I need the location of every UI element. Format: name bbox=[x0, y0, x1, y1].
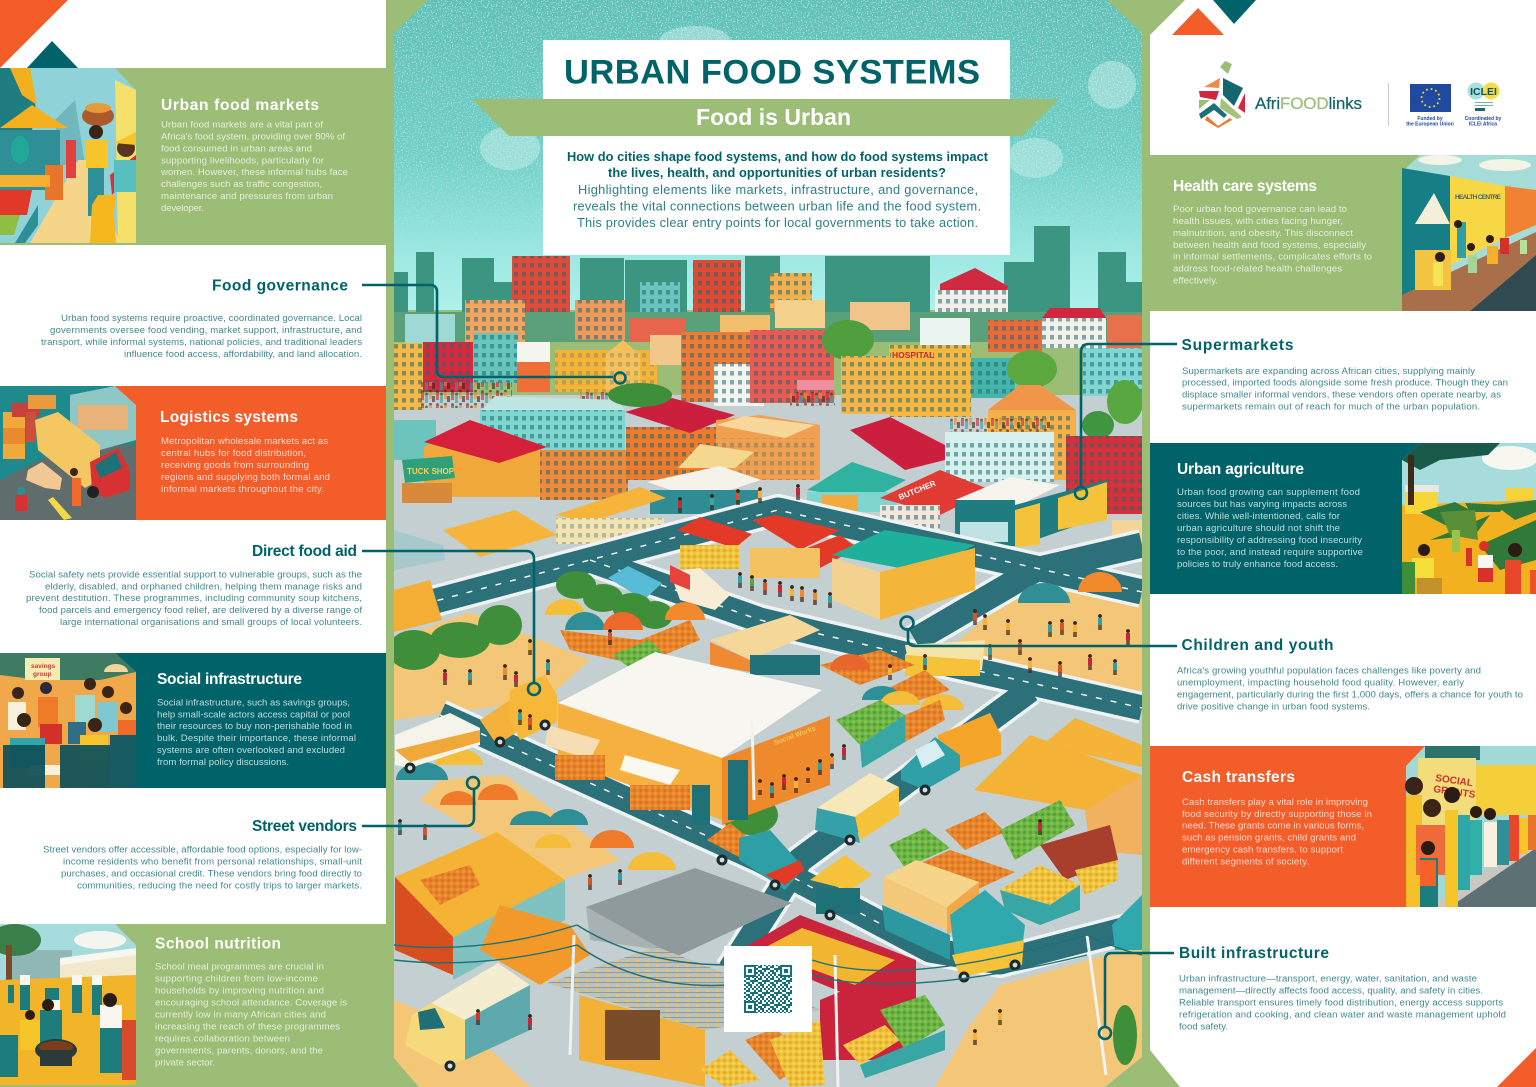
body text: households by improving nutrition and bbox=[155, 986, 324, 996]
body text: maintenance and pressures from urban bbox=[161, 191, 333, 202]
body text: transport, while informal systems, national policies, and traditional leaders bbox=[41, 337, 362, 348]
utility poles and wires bbox=[394, 722, 1142, 1087]
body text: Africa's food system, providing over 80% of bbox=[161, 132, 345, 142]
crowd of people bbox=[398, 484, 1130, 1045]
image: social grants queue: GRANTS bbox=[1433, 784, 1476, 801]
cargo truck bbox=[882, 860, 1025, 982]
image: savings group bbox=[0, 653, 136, 788]
image: street market bbox=[0, 68, 136, 243]
panel: urban food markets bbox=[0, 68, 386, 245]
body text: address food-related health challenges bbox=[1173, 264, 1342, 274]
body text bbox=[160, 120, 348, 214]
ambulance bbox=[480, 675, 557, 748]
body text: regions and supplying both formal and bbox=[161, 472, 330, 483]
image: truck loading bbox=[0, 386, 136, 520]
logo panel bbox=[1199, 61, 1502, 128]
body text: Urban food growing can supplement food bbox=[1177, 487, 1360, 498]
panel: school nutrition bbox=[0, 924, 386, 1087]
body text: supporting livelihoods, particularly for bbox=[161, 156, 325, 166]
body text: malnutrition, and obesity. This disconnect bbox=[1173, 228, 1353, 239]
divider bbox=[1388, 83, 1389, 126]
logo: ICLEI: ICLEI Africa bbox=[1469, 122, 1497, 128]
body text: bulk. Despite their importance, these informal bbox=[157, 733, 356, 744]
body text: drive positive change in urban food systems. bbox=[1177, 702, 1370, 712]
body text bbox=[157, 698, 356, 768]
heading: Logistics systems bbox=[160, 409, 298, 426]
body text: help small-scale actors access capital or pool bbox=[157, 710, 350, 720]
image: urban farm bbox=[1402, 443, 1536, 594]
body text: informal markets throughout the city. bbox=[161, 484, 324, 495]
icon: QR code bbox=[724, 946, 812, 1032]
body text bbox=[43, 844, 362, 892]
heading: Food governance bbox=[212, 278, 348, 294]
body text: Africa's growing youthful population faces challenges like poverty and bbox=[1177, 666, 1481, 676]
connector: street vendors bbox=[362, 777, 479, 826]
panel: social infrastructure bbox=[0, 653, 386, 788]
body text: large international organisations and small groups of local volunteers. bbox=[60, 617, 362, 628]
body text: supermarkets remain out of reach for much of the urban population. bbox=[1182, 402, 1480, 412]
intro text: How do cities shape food systems, and how do food systems impact bbox=[567, 149, 989, 164]
image: health centre bbox=[1402, 155, 1536, 311]
middle buildings: TUCK SHOP bbox=[407, 467, 455, 476]
heading: Street vendors bbox=[252, 818, 357, 835]
title: URBAN FOOD SYSTEMS bbox=[564, 54, 980, 92]
body text: urban agriculture should not shift the bbox=[1177, 523, 1340, 534]
decorative corner: bottom right bbox=[1150, 1048, 1536, 1087]
body text: sources but has varying impacts across bbox=[1177, 499, 1347, 510]
image: social grants queue: SOCIAL bbox=[1435, 773, 1474, 789]
body text: food safety. bbox=[1179, 1022, 1228, 1032]
image: social grants queue bbox=[1405, 746, 1536, 907]
centre frame band bbox=[386, 0, 1150, 1087]
heading: Health care systems bbox=[1173, 178, 1317, 195]
teal delivery truck bbox=[901, 713, 1001, 796]
white minibus bbox=[395, 713, 480, 774]
body text: elderly, disabled, and orphaned children, helping them manage risks and bbox=[45, 582, 362, 592]
body text: Street vendors offer accessible, affordable food options, especially for low- bbox=[43, 844, 362, 856]
connector: food governance bbox=[362, 285, 626, 384]
city blocks row: HOSPITAL bbox=[892, 350, 934, 360]
panel: built infrastructure bbox=[1179, 945, 1506, 1032]
logo: ICLEI: ICLEI bbox=[1470, 86, 1497, 98]
body text: Social safety nets provide essential support to vulnerable groups, such as the bbox=[29, 570, 362, 580]
central warehouse bbox=[545, 652, 830, 825]
body text: to the poor, and instead require supportive bbox=[1177, 547, 1363, 558]
intro text: reveals the vital connections between urban life and the food system. bbox=[573, 198, 981, 214]
body text: currently low in many African cities and bbox=[155, 1010, 326, 1020]
body text: governments oversee food vending, market support, infrastructure, and bbox=[50, 325, 362, 336]
body text: food security by directly supporting those in bbox=[1182, 809, 1372, 820]
heading: Supermarkets bbox=[1182, 337, 1294, 354]
body text bbox=[26, 570, 362, 628]
body text: effectively. bbox=[1173, 276, 1218, 286]
decorative corner: top left bbox=[0, 0, 78, 68]
logo: EU flag bbox=[1406, 84, 1454, 128]
image: savings group: savings bbox=[31, 663, 56, 670]
sky bbox=[394, 0, 1142, 310]
panel: direct food aid bbox=[26, 543, 362, 628]
body text: increasing the reach of these programmes bbox=[155, 1022, 340, 1032]
body text: influence food access, affordability, and land allocation. bbox=[124, 349, 362, 360]
panel: children and youth bbox=[1177, 637, 1523, 712]
body text: management—directly affects food access, quality, and safety in cities. bbox=[1179, 986, 1483, 996]
yellow van bbox=[815, 773, 899, 846]
body text bbox=[1179, 974, 1506, 1032]
middle buildings: BUTCHER bbox=[897, 479, 937, 502]
body text: requires collaboration between bbox=[155, 1034, 290, 1044]
body text: governments, parents, donors, and the bbox=[155, 1046, 323, 1056]
intro text bbox=[567, 149, 989, 230]
decorative corner: top right bbox=[1150, 0, 1256, 35]
central food stalls bbox=[394, 515, 985, 705]
panel: cash transfers bbox=[1150, 746, 1536, 907]
heading: Cash transfers bbox=[1182, 769, 1295, 786]
body text: food consumed in urban areas and bbox=[161, 144, 312, 154]
body text: unemployment, impacting household food quality. However, early bbox=[1177, 678, 1464, 688]
heading: Urban agriculture bbox=[1177, 461, 1304, 478]
body text: Metropolitan wholesale markets act as bbox=[161, 436, 328, 447]
body text: in informal settlements, complicates efforts to bbox=[1173, 252, 1372, 262]
body text: refrigeration and cooking, and clean water and waste management uphold bbox=[1179, 1010, 1506, 1020]
body text: prevent destitution. These programmes, including community soup kitchens, bbox=[26, 593, 362, 604]
logo: AfriFOODlinks: AfriFOODlinks bbox=[1255, 94, 1362, 113]
body text: challenges such as traffic congestion, bbox=[161, 179, 322, 190]
logo: AfriFOODlinks bbox=[1199, 61, 1362, 128]
trees bbox=[388, 383, 1137, 1065]
subtitle banner: Food is Urban bbox=[696, 104, 851, 130]
heading: Social infrastructure bbox=[157, 671, 302, 688]
body text: systems are often overlooked and excluded bbox=[157, 745, 345, 756]
body text bbox=[161, 436, 330, 495]
ground bbox=[394, 395, 1142, 1087]
city blocks row bbox=[394, 320, 1143, 480]
body text: food parcels and emergency food relief, are delivered by a diverse range of bbox=[39, 605, 362, 616]
heading: Direct food aid bbox=[252, 543, 357, 560]
body text: income residents who benefit from personal relationships, small-unit bbox=[63, 856, 362, 868]
connector: children and youth bbox=[900, 616, 1177, 646]
panel: street vendors bbox=[43, 818, 362, 892]
heading: School nutrition bbox=[155, 936, 281, 952]
panel: supermarkets bbox=[1182, 337, 1508, 412]
title panel bbox=[472, 40, 1059, 255]
body text bbox=[1177, 666, 1523, 712]
far buildings bbox=[394, 256, 1142, 352]
body text bbox=[1182, 366, 1508, 412]
subtitle banner bbox=[472, 99, 1059, 136]
image: savings group: group bbox=[33, 671, 51, 678]
body text: receiving goods from surrounding bbox=[161, 460, 309, 471]
body text: need. These grants come in various forms, bbox=[1182, 820, 1364, 832]
body text: responsibility of addressing food insecurity bbox=[1177, 535, 1362, 546]
connector: built infrastructure bbox=[1099, 953, 1174, 1039]
panel: urban agriculture bbox=[1150, 443, 1536, 594]
body text: supporting children from low-income bbox=[155, 974, 318, 984]
intro text: Highlighting elements like markets, infrastructure, and governance, bbox=[578, 182, 978, 197]
body text: communities, reducing the need for costly trips to larger markets. bbox=[77, 880, 362, 892]
body text: purchases, and occasional credit. These vendors bring food directly to bbox=[61, 868, 362, 880]
body text: such as pension grants, child grants and bbox=[1182, 832, 1356, 844]
heading: Children and youth bbox=[1182, 637, 1334, 654]
body text: Cash transfers play a vital role in improving bbox=[1182, 797, 1368, 808]
illustration: isometric city bbox=[388, 0, 1143, 1087]
roads bbox=[394, 510, 1142, 970]
logo: EU flag: the European Union bbox=[1406, 122, 1454, 128]
body text: from formal policy discussions. bbox=[157, 757, 289, 768]
pickup bbox=[707, 823, 804, 890]
body text: different segments of society. bbox=[1182, 856, 1309, 868]
tuk tuk bbox=[810, 855, 872, 920]
delivery truck bottom left bbox=[405, 963, 530, 1072]
body text: their resources to buy non-perishable food in bbox=[157, 721, 352, 732]
body text: central hubs for food distribution, bbox=[161, 448, 306, 459]
body text: between health and food systems, especially bbox=[1173, 240, 1366, 251]
image: health centre: HEALTH CENTRE bbox=[1455, 194, 1502, 201]
body text: processed, imported foods alongside some fresh produce. Though they can bbox=[1182, 378, 1508, 388]
body text: women. However, these informal hubs face bbox=[160, 167, 348, 178]
body text bbox=[155, 962, 347, 1068]
body text: Supermarkets are expanding across African cities, supplying mainly bbox=[1182, 366, 1475, 377]
logo: EU flag: Funded by bbox=[1417, 116, 1443, 122]
body text: encouraging school attendance. Coverage is bbox=[155, 998, 347, 1008]
body text: Poor urban food governance can lead to bbox=[1173, 204, 1347, 215]
body text: cities. While well-intentioned, calls for bbox=[1177, 511, 1341, 522]
middle buildings bbox=[394, 396, 1142, 570]
intro text: This provides clear entry points for local governments to take action. bbox=[577, 215, 978, 230]
heading: Built infrastructure bbox=[1179, 945, 1329, 962]
vehicles bbox=[395, 675, 1142, 1072]
umbrellas bbox=[396, 572, 1122, 870]
body text: School meal programmes are crucial in bbox=[155, 962, 324, 972]
body text: emergency cash transfers, to support bbox=[1182, 844, 1343, 856]
produce crates bbox=[420, 700, 1118, 1087]
intro text: the lives, health, and opportunities of urban residents? bbox=[608, 165, 946, 180]
logo: ICLEI bbox=[1465, 82, 1502, 128]
body text bbox=[1182, 797, 1372, 868]
image: school meals bbox=[0, 924, 136, 1085]
body text: engagement, particularly during the first 1,000 days, offers a chance for youth to bbox=[1177, 690, 1523, 700]
body text: Social infrastructure, such as savings groups, bbox=[157, 698, 350, 708]
body text bbox=[1177, 487, 1363, 570]
body text: policies to truly enhance food access. bbox=[1177, 559, 1338, 570]
body text bbox=[41, 313, 362, 360]
body text: Reliable transport ensures timely food distribution, energy access supports bbox=[1179, 998, 1503, 1008]
body text: health issues, with cities facing hunger, bbox=[1173, 216, 1343, 227]
logo: ICLEI: Coordinated by bbox=[1465, 116, 1502, 122]
panel: logistics systems bbox=[0, 386, 386, 520]
panel: health care systems bbox=[1150, 155, 1536, 311]
body text bbox=[1173, 204, 1372, 286]
central warehouse: Social Works bbox=[773, 725, 817, 747]
sand areas bbox=[394, 585, 1142, 1087]
body text: Urban food markets are a vital part of bbox=[161, 120, 323, 130]
panel: food governance bbox=[41, 278, 362, 360]
connector: supermarkets bbox=[1075, 344, 1177, 499]
heading: Urban food markets bbox=[161, 97, 319, 114]
connector: direct food aid bbox=[362, 551, 540, 695]
body text: private sector. bbox=[155, 1058, 215, 1068]
yellow-roofed markets bbox=[395, 718, 1142, 1087]
body text: displace smaller informal vendors, these vendors often operate nearby, as bbox=[1182, 390, 1501, 400]
body text: Urban infrastructure—transport, energy, water, sanitation, and waste bbox=[1179, 974, 1477, 984]
body text: Urban food systems require proactive, coordinated governance. Local bbox=[61, 313, 362, 324]
body text: developer. bbox=[161, 203, 204, 214]
skyline bbox=[394, 226, 1142, 312]
